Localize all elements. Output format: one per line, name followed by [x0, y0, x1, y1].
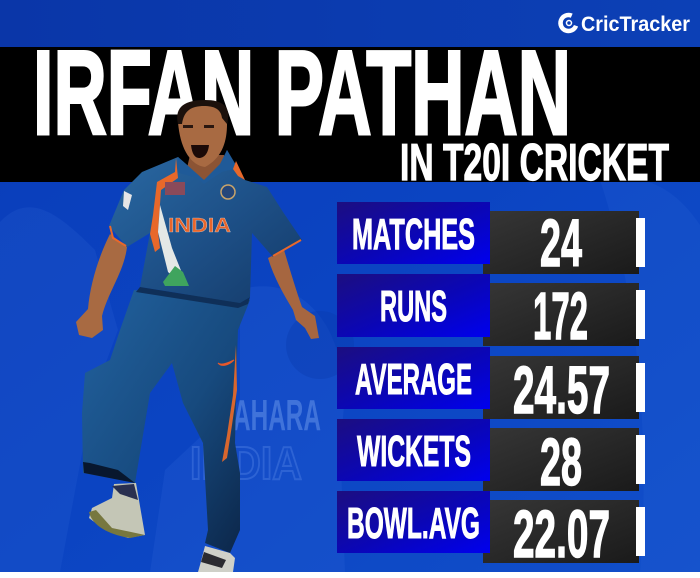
- stat row: average: 24.57: [513, 353, 610, 428]
- icon: logo mark: [558, 13, 579, 33]
- mouth: [191, 145, 209, 158]
- pants cuff shadow: [83, 462, 135, 483]
- stat row: average: [337, 347, 645, 428]
- background ghost player: AHARA: [233, 391, 321, 440]
- left shoe laces: [112, 484, 138, 500]
- shirt: [109, 150, 302, 303]
- pants swoosh: [218, 360, 234, 365]
- hair: [177, 100, 228, 124]
- right shoe laces: [201, 552, 226, 568]
- stat row: matches: [337, 202, 645, 281]
- sleeve patch: [123, 191, 132, 210]
- stat row: wickets: 28: [540, 425, 582, 500]
- left shoe: [89, 483, 145, 538]
- stat row: matches: 24: [540, 206, 582, 281]
- shirt orange tricolour stripe: [150, 158, 178, 252]
- stat row: wickets: WICKETS: [357, 427, 471, 476]
- tournament badge: [165, 182, 185, 195]
- shirt hem shadow: [136, 287, 250, 308]
- logo: CricTracker: CricTracker: [581, 13, 690, 36]
- head: [178, 103, 227, 167]
- right arm: [268, 250, 319, 339]
- title band: [0, 47, 700, 182]
- stat row: bowling average: BOWL.AVG: [347, 499, 480, 548]
- shirt text: INDIA: [168, 215, 231, 237]
- stat row: average: AVERAGE: [355, 355, 472, 404]
- stat row: runs: RUNS: [380, 282, 447, 331]
- stat row: bowling average: [337, 491, 645, 572]
- right shoe: [198, 546, 235, 572]
- stat row: bowling average: 22.07: [513, 497, 610, 572]
- background ghost player: INDIA: [190, 437, 302, 489]
- collar: [176, 150, 237, 184]
- background ghost player: [0, 178, 700, 572]
- stat row: wickets: [337, 419, 645, 500]
- left shoe sole: [89, 510, 145, 538]
- neck: [187, 155, 226, 182]
- player figure: [76, 100, 319, 572]
- stat row: runs: 172: [533, 279, 588, 354]
- top header strip: [0, 0, 700, 47]
- bottom white strip: [0, 572, 700, 578]
- eyes: [183, 125, 214, 128]
- left arm: [76, 234, 127, 338]
- stat row: runs: [337, 274, 645, 354]
- shirt badge: [221, 185, 235, 199]
- stats panel: [337, 202, 645, 572]
- stat row: matches: MATCHES: [352, 210, 475, 259]
- sleeve and collar trim: [110, 226, 301, 256]
- pants: [82, 290, 250, 553]
- pants stripe: [222, 345, 237, 462]
